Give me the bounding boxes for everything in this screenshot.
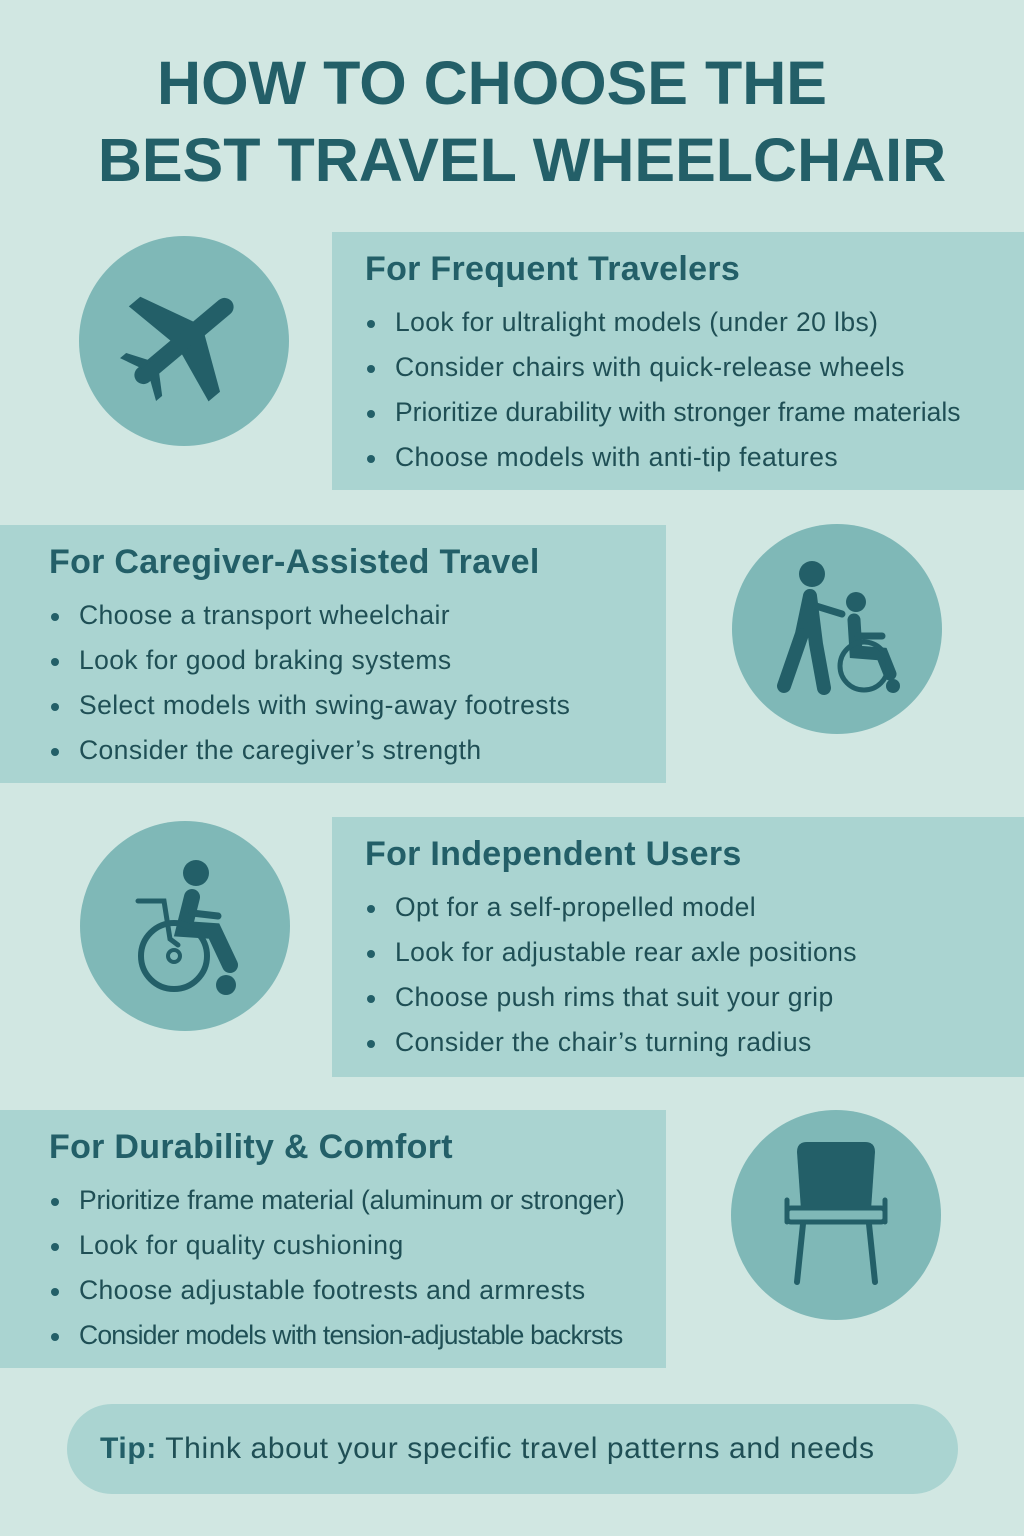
bullet list: Choose push rims that suit your grip <box>395 982 834 1012</box>
heading: For Frequent Travelers <box>365 250 740 288</box>
bullet list: Look for adjustable rear axle positions <box>395 937 857 967</box>
bullet list: Choose a transport wheelchair <box>79 600 450 630</box>
icon: chair <box>731 1110 941 1320</box>
bullet list: Look for ultralight models (under 20 lbs) <box>395 307 878 337</box>
bullet list: Prioritize frame material (aluminum or stronger) <box>79 1185 625 1215</box>
title: HOW TO CHOOSE THE <box>157 49 827 117</box>
tip callout <box>67 1404 958 1494</box>
panel: durability & comfort <box>0 1110 666 1368</box>
bullet list: Consider models with tension-adjustable backrsts <box>79 1320 622 1350</box>
bullet list: Opt for a self-propelled model <box>395 892 756 922</box>
title: BEST TRAVEL WHEELCHAIR <box>98 126 946 194</box>
bullet list <box>367 892 857 1057</box>
bullet list: Consider chairs with quick-release wheels <box>395 352 905 382</box>
bullet list <box>367 307 961 472</box>
bullet list: Consider the caregiver’s strength <box>79 735 482 765</box>
bullet list: Consider the chair’s turning radius <box>395 1027 812 1057</box>
bullet list: Choose models with anti-tip features <box>395 442 838 472</box>
icon: independent wheelchair user <box>80 821 290 1031</box>
bullet list: Choose adjustable footrests and armrests <box>79 1275 586 1305</box>
heading: For Independent Users <box>365 835 742 873</box>
panel: caregiver-assisted <box>0 525 666 783</box>
bullet list <box>51 1185 625 1350</box>
heading: For Durability & Comfort <box>49 1128 453 1166</box>
bullet list: Look for good braking systems <box>79 645 451 675</box>
heading: For Caregiver-Assisted Travel <box>49 543 540 581</box>
tip callout: Tip: Think about your specific travel patterns and needs <box>100 1432 875 1465</box>
title <box>98 49 946 194</box>
panel: independent users <box>332 817 1024 1077</box>
panel: frequent travelers <box>332 232 1024 490</box>
bullet list: Look for quality cushioning <box>79 1230 404 1260</box>
icon: caregiver pushing wheelchair <box>732 524 942 734</box>
bullet list <box>51 600 570 765</box>
bullet list: Prioritize durability with stronger frame materials <box>395 397 961 427</box>
icon: airplane <box>79 236 289 446</box>
bullet list: Select models with swing-away footrests <box>79 690 570 720</box>
